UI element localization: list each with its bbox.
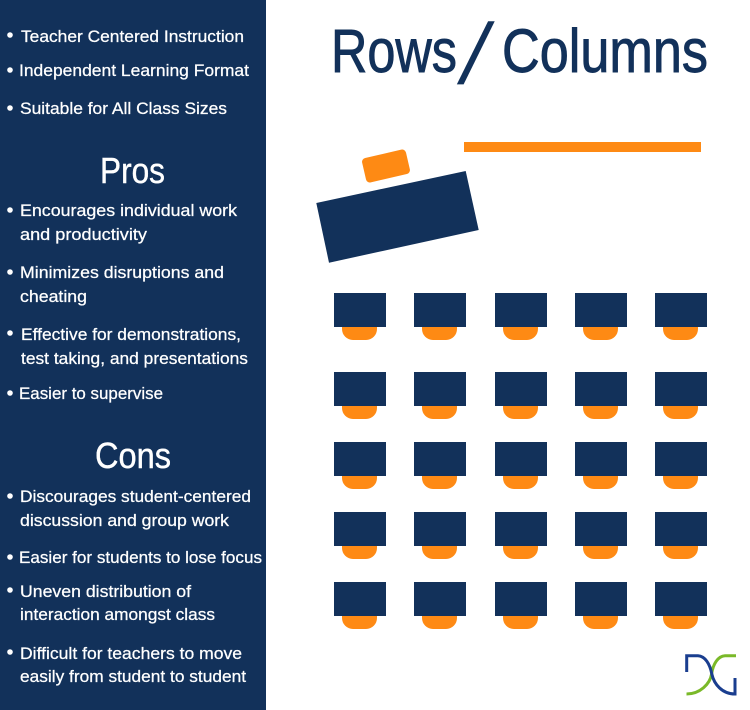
list: cons: discussion and group work [20, 511, 230, 530]
title [331, 6, 708, 102]
list: overview: Suitable for All Class Sizes [20, 99, 227, 118]
title: Rows [331, 17, 457, 85]
list: cons: interaction amongst class [20, 605, 215, 624]
list: pros: and productivity [20, 225, 148, 244]
icon: DG logo [686, 656, 736, 694]
title: / [453, 6, 499, 102]
list: cons: Uneven distribution of [20, 582, 191, 601]
student desks: row 2 [334, 372, 707, 419]
teacher desk [316, 171, 479, 263]
list: overview: Independent Learning Format [19, 61, 249, 80]
teacher chair [361, 149, 411, 183]
list: cons: easily from student to student [20, 667, 246, 686]
student desks: row 5 [334, 582, 707, 629]
list: pros: Minimizes disruptions and [20, 263, 224, 282]
student desks: row 4 [334, 512, 707, 559]
list: cons: Discourages student-centered [20, 487, 251, 506]
list: overview: Teacher Centered Instruction [21, 27, 244, 46]
title: Columns [502, 17, 708, 85]
list: overview [7, 27, 249, 118]
list: cons: Easier for students to lose focus [19, 548, 262, 567]
list: pros: test taking, and presentations [21, 349, 248, 368]
heading: cons: Cons [95, 435, 171, 476]
heading: pros: Pros [100, 150, 165, 191]
list: pros: cheating [20, 287, 87, 306]
list: pros: Easier to supervise [19, 384, 163, 403]
list: pros: Encourages individual work [20, 201, 238, 220]
list: pros [7, 201, 248, 403]
whiteboard bar [464, 142, 701, 152]
list: pros: Effective for demonstrations, [21, 325, 241, 344]
student desks: row 3 [334, 442, 707, 489]
student desks: row 1 [334, 293, 707, 340]
list: cons [7, 487, 262, 686]
list: cons: Difficult for teachers to move [20, 644, 242, 663]
panel: sidebar [0, 0, 266, 710]
